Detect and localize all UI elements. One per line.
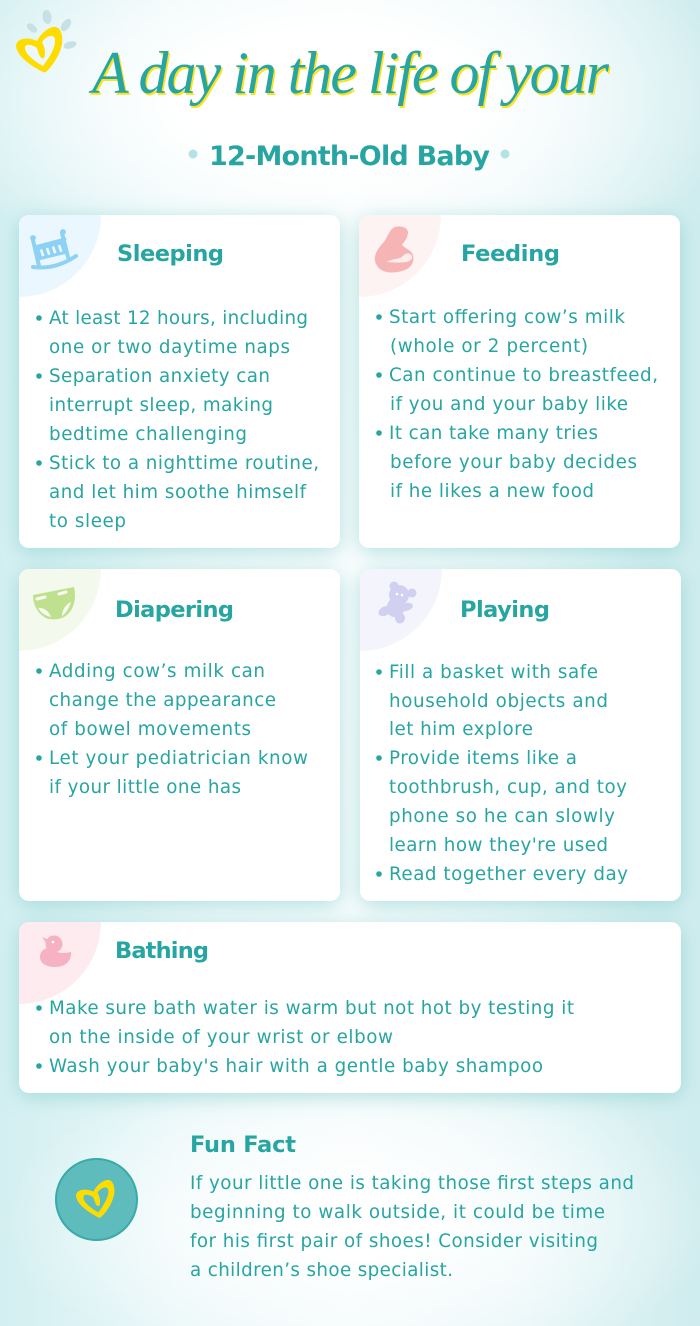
heading: Bathing: [115, 938, 209, 964]
list: let him explore: [389, 719, 533, 740]
fun fact: [190, 1132, 634, 1281]
corner tint: [19, 569, 101, 651]
heading: Feeding: [461, 241, 560, 267]
list: if your little one has: [49, 777, 241, 798]
heading: Diapering: [115, 597, 234, 623]
icon: mother and baby: [375, 226, 413, 273]
panel: playing: [360, 569, 681, 901]
list: before your baby decides: [390, 452, 637, 473]
corner tint: [360, 569, 442, 651]
corner tint: [19, 922, 101, 1004]
icon: teddy bear: [377, 582, 416, 624]
list: change the appearance: [49, 690, 276, 711]
logo: yellow heart with rays: [16, 9, 77, 72]
title: A day in the life of your: [88, 40, 610, 106]
corner tint: [359, 215, 441, 297]
heading: Sleeping: [117, 241, 224, 267]
list: Start offering cow’s milk: [389, 307, 625, 328]
list: (whole or 2 percent): [390, 336, 588, 357]
list: of bowel movements: [49, 719, 251, 740]
list: Provide items like a: [389, 748, 577, 769]
list: [36, 661, 308, 798]
list: Make sure bath water is warm but not hot by testing it: [49, 998, 574, 1019]
list: Can continue to breastfeed,: [389, 365, 658, 386]
list: bedtime challenging: [49, 424, 247, 445]
panel: diapering: [19, 569, 340, 901]
list: Stick to a nighttime routine,: [49, 453, 319, 474]
list: Read together every day: [389, 864, 628, 885]
list: if you and your baby like: [390, 394, 628, 415]
list: if he likes a new food: [390, 481, 594, 502]
title: A day in the life of your: [90, 42, 611, 108]
list: Wash your baby's hair with a gentle baby shampoo: [49, 1056, 543, 1077]
heading: Playing: [460, 597, 550, 623]
list: household objects and: [389, 691, 608, 712]
heading: Fun Fact: [190, 1132, 296, 1158]
text block: beginning to walk outside, it could be time: [190, 1202, 605, 1223]
list: Adding cow’s milk can: [49, 661, 265, 682]
list: and let him soothe himself: [49, 482, 307, 503]
list: [36, 308, 319, 532]
panel: sleeping: [19, 215, 340, 548]
panel: feeding: [359, 215, 680, 548]
text block: If your little one is taking those first steps and: [190, 1173, 634, 1194]
list: phone so he can slowly: [389, 806, 615, 827]
icon: diaper: [33, 587, 75, 619]
list: one or two daytime naps: [49, 337, 290, 358]
list: learn how they're used: [389, 835, 608, 856]
text block: for his first pair of shoes! Consider visiting: [190, 1231, 598, 1252]
list: [36, 998, 574, 1077]
list: [376, 307, 658, 502]
list: Fill a basket with safe: [389, 662, 598, 683]
icon: rubber duck: [40, 936, 71, 967]
corner tint: [19, 215, 101, 297]
list: Separation anxiety can: [49, 366, 270, 387]
card shadows: [19, 219, 681, 1097]
list: It can take many tries: [389, 423, 598, 444]
list: on the inside of your wrist or elbow: [49, 1027, 393, 1048]
list: [376, 662, 628, 885]
list: Let your pediatrician know: [49, 748, 308, 769]
list: toothbrush, cup, and toy: [389, 777, 627, 798]
text block: a children’s shoe specialist.: [190, 1260, 453, 1281]
subtitle: 12-Month-Old Baby: [209, 141, 490, 172]
list: At least 12 hours, including: [49, 308, 308, 329]
text block: [190, 1173, 634, 1281]
list: interrupt sleep, making: [49, 395, 273, 416]
icon: crib: [31, 230, 76, 268]
icon: fun fact badge: [56, 1159, 137, 1240]
list: to sleep: [49, 511, 126, 532]
panel: bathing: [19, 922, 681, 1093]
